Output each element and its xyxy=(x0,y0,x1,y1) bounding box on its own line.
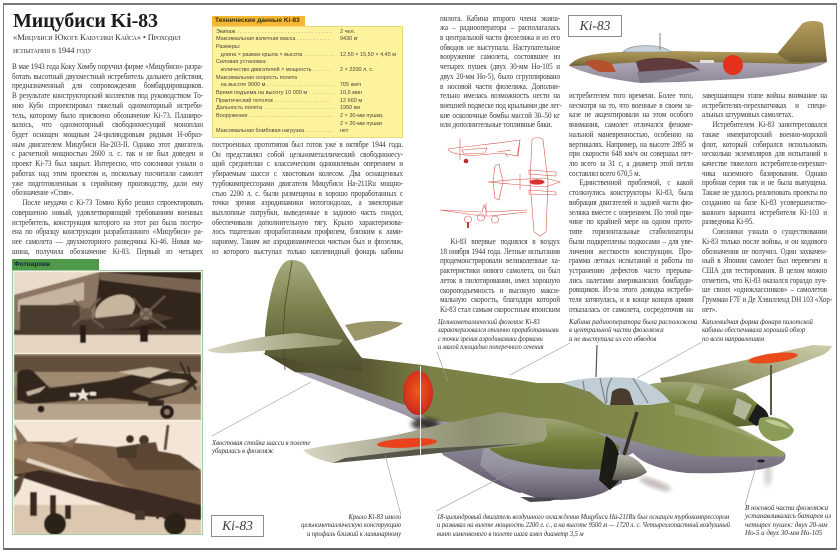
text column 4: нальной маневренностью, особенно на xyxy=(569,130,693,139)
text column 3 top: обводов не выступала. Наступательное xyxy=(440,43,560,52)
hinomaru xyxy=(723,55,743,75)
text column 4: ровщиков. Из-за этого доводка истреби- xyxy=(569,285,693,294)
text column 3 top: тельно имелась возможность нести на xyxy=(440,91,560,100)
table header: Технические данные Ki-83 xyxy=(215,17,300,24)
fuselage hinomaru xyxy=(403,371,433,415)
caption: fuselage: с точки зрения аэродинамики формами xyxy=(438,335,543,343)
text column 1: истребитель, конструкция которого на этот раз была постро- xyxy=(12,218,203,226)
text column 5: ванного варианта истребителя Ki-103 и xyxy=(702,208,827,217)
text column 1: шина, получила обозначение Ki-83. Первый из четырех xyxy=(12,247,203,256)
subtitle: «Мицубиси Юкоге Кабусики Кайса» • Проходил xyxy=(13,32,181,42)
side-view wheel xyxy=(464,159,468,163)
rear fuselage and belly xyxy=(263,353,785,493)
text column 2: нарному. Таким же аэродинамически чистым был и фюзеляж, xyxy=(212,237,403,246)
caption: nose guns: Но-5 и двух 30-мм Но-105 xyxy=(745,529,822,537)
main aircraft illustration xyxy=(207,260,832,502)
prop wash near engine xyxy=(638,474,672,494)
side view xyxy=(448,139,520,160)
text column 5: чика наземного базирования. Однако xyxy=(702,169,827,178)
text column 5: ше своих «одноклассников» – самолетов xyxy=(702,285,827,294)
text column 3 bottom: скороподъемность и высокую макси- xyxy=(440,286,560,295)
Ki-83 label top xyxy=(568,15,622,37)
caption: fuselage: Цельнометаллический фюзеляж Ki-83 xyxy=(438,318,540,326)
text column 4: лю всего за 31 с, а диаметр этой петли xyxy=(569,159,693,168)
subtitle xyxy=(13,32,181,55)
caption: canopy xyxy=(702,318,813,343)
caption: nose guns: устанавливалась батарея из xyxy=(745,512,831,520)
text column 3 bottom: Ki-83 стал самым скоростным японским xyxy=(440,305,560,314)
text column 5: качестве тяжелого истребителя-перехват- xyxy=(702,159,827,168)
text column 4: типе горизонтальные стабилизаторы xyxy=(569,227,693,236)
text column 5: созданию на базе Ki-83 усовершенство- xyxy=(702,198,827,207)
text column 4: казе не акцентировали на этом особого xyxy=(569,110,693,119)
caption: wing: и профиль близкий к ламинарному xyxy=(307,530,401,538)
table body: 1950 км xyxy=(340,105,360,111)
text column 2: лось тщательно проработанным профилем, близким к лами- xyxy=(212,227,403,236)
text column 2: убираемым шасси с хвостовым колесом. Два оснащенных xyxy=(212,169,403,178)
text column 3 top xyxy=(440,14,562,129)
gun port xyxy=(757,460,765,462)
text column 5: нет». xyxy=(702,305,717,314)
text column 3 bottom: Ki-83 впервые поднялся в воздух xyxy=(450,237,560,246)
Ki-83 label bottom xyxy=(211,515,264,537)
caption: engine: и развивал на взлете мощность 2200 л. с., а на высоте 9500 м — 1720 л. с. Четырехлопастный воздушный xyxy=(437,521,730,529)
caption: tail wheel: убиралась в фюзеляж xyxy=(212,447,274,455)
text column 1: совершенно новый, удовлетворяющий требованиям военных xyxy=(12,208,203,217)
table body: Вооружение .............................. xyxy=(216,113,334,119)
table body: на высоте 9000 м ........................ xyxy=(221,82,335,88)
fuselage side xyxy=(569,51,827,83)
text column 1: валось, что одномоторный свободнонесущий моноплан xyxy=(12,120,203,129)
engine nacelle xyxy=(585,60,616,72)
plan view xyxy=(488,138,560,236)
text column 4: устранению дефектов часто прерыва- xyxy=(569,266,693,275)
photo archive header: Фотоархив xyxy=(14,261,50,268)
text column 4: вибрация двигателей и задней части фю- xyxy=(569,198,693,207)
text column 3 top: вооружение самолета, состоявшее из xyxy=(440,52,560,61)
text column 3 bottom: продемонстрировали великолепные ха- xyxy=(440,256,560,265)
text column 1: уже подготовленным к серийному производству, дали ему xyxy=(12,179,203,188)
caption: canopy: по всем направлениям xyxy=(702,335,764,343)
Ki-83 label bottom: Ki-83 xyxy=(222,518,253,533)
photo archive header xyxy=(12,259,99,270)
caption: canopy: кабины обеспечивала хороший обзор xyxy=(702,326,805,334)
table body: Дальность полета ......................... xyxy=(216,105,334,111)
text column 4: при скорости 648 км/ч он совершал пет- xyxy=(569,149,693,158)
text column 5: обозначения не получил. Один захвачен- xyxy=(702,246,827,256)
text column 1: ным двигателем Мицубиси На-203-II. Однако этот двигатель xyxy=(12,140,203,149)
text column 2: обеспечивали дополнительную тягу. Крыло характеризова- xyxy=(212,218,403,227)
text column 5: несколько экземпляров для испытаний в xyxy=(702,149,827,158)
text column 5: ный в Японии самолет был перевезен в xyxy=(702,256,827,265)
caption: radio operator cabin: в центральной части фюзеляжа xyxy=(569,326,664,334)
fuselage band xyxy=(700,60,714,63)
photo: technicians on the wing xyxy=(14,421,201,535)
text column 1: работах над этим проектом и, поскольку посчитали самолет xyxy=(12,169,203,178)
leader lines xyxy=(212,342,757,515)
front view xyxy=(440,203,527,228)
caption: fuselage: характеризовался отлично проработанными xyxy=(438,326,559,334)
fin xyxy=(777,21,827,62)
far engine xyxy=(650,365,794,441)
wing leading edge shade xyxy=(333,441,544,463)
profile view of the aircraft xyxy=(569,21,827,83)
text column 1: В мае 1943 года Коку Хомбу поручил фирме «Мицубиси» разра- xyxy=(12,62,203,71)
table body: Практический потолок .................... xyxy=(216,98,331,104)
subtitle: испытания в 1944 году xyxy=(13,45,92,55)
table body: 10,5 мин xyxy=(340,90,362,96)
table body: 2 × 2200 л. с. xyxy=(340,67,374,73)
text column 2: выхлопные патрубки, выведенные в заднюю часть гондол, xyxy=(212,208,403,217)
text column 3 top: в центральной части фюзеляжа и из его xyxy=(440,33,560,42)
text column 1: проект Ki-73 был закрыт. Интересно, что союзники узнали о xyxy=(12,159,203,168)
caption: engine: винт изменяемого в полете шага имел диаметр 3,5 м xyxy=(437,530,584,538)
text column 5: отметить, что Ki-83 оказался гораздо луч- xyxy=(702,276,827,285)
text column 3 bottom xyxy=(440,237,560,314)
text column 3 top: пилота. Кабина второго члена экипа- xyxy=(440,14,560,22)
text column 4: столкнулись конструкторы Ki-83, была xyxy=(569,188,693,197)
text column 1: мио Кубо спроектировал тяжелый одномоторный истреби- xyxy=(12,101,203,110)
fuselage upper olive xyxy=(263,353,785,457)
text column 3 bottom: мальную скорость, благодаря которой xyxy=(440,295,560,304)
table body: 2 × 20-мм пушки xyxy=(340,121,382,127)
photo: captured aircraft on airfield xyxy=(14,354,201,420)
table body: 2 чел. xyxy=(340,28,355,34)
text column 2: щий среднеплан с классическим однокилевым оперением и xyxy=(212,159,403,168)
text column 3 bottom: 18 ноября 1944 года. Летные испытания xyxy=(440,247,560,256)
table body: 12 660 м xyxy=(340,98,362,104)
photo: hangar xyxy=(14,272,201,353)
Ki-83 label top: Ki-83 xyxy=(580,18,610,33)
caption: wing: Крыло Ki-83 имело xyxy=(349,513,401,521)
text column 2: точки зрения аэродинамики мотогондолах, а эжекторные xyxy=(212,198,403,207)
caption: engine: 18-цилиндровый двигатель воздушного охлаждения Мицубиси На-211Ru был оснащен турбокомпрессором xyxy=(437,513,729,521)
text column 4: чине по крайней мере на одном прото- xyxy=(569,217,693,226)
text column 3 top: кие осколочные бомбы массой 30–50 кг xyxy=(440,111,560,120)
table header xyxy=(212,16,305,26)
near wing xyxy=(303,412,547,463)
caption: tail wheel xyxy=(211,439,310,455)
antenna xyxy=(659,33,661,50)
text column 1: тель, которому было присвоено обозначение Ki-73. Планиро- xyxy=(12,111,203,120)
text column 1: нее самолета — двухмоторного разведчика Ki-46. Новая ма- xyxy=(12,237,203,246)
text column 4: зеляжа вместе с оперением. По этой при- xyxy=(569,208,693,217)
text column 1: обозначение «Стив». xyxy=(12,188,73,197)
text column 5: также императорский военно-морской xyxy=(702,130,827,139)
text column 5: США для тестирования. В целом можно xyxy=(702,266,827,275)
text column 4: личения жесткости конструкции. Про- xyxy=(569,246,693,256)
table body: 2 × 30-мм пушки, xyxy=(340,113,384,119)
caption: nose guns: В носовой части фюзеляжа xyxy=(745,504,828,512)
caption: wing: цельнометаллическую конструкцию xyxy=(301,521,401,529)
caption: radio operator cabin: Кабина радиооператора была расположена xyxy=(569,318,697,326)
text column 3 top: внешней подвеске под крыльями две лег- xyxy=(440,101,562,110)
caption: fuselage: и малой площадью поперечного сечения xyxy=(438,343,543,351)
antenna mast xyxy=(596,345,597,377)
text column 2: построенных прототипов был готов уже в октябре 1944 года. xyxy=(212,140,403,149)
caption: radio operator cabin xyxy=(568,318,697,343)
table body: количество двигателей × мощность ....... xyxy=(221,67,333,73)
wing underside hinomaru xyxy=(377,437,437,449)
text column 2: Он представлял собой цельнометаллический свободнонесу- xyxy=(212,150,403,159)
table body: 705 км/ч xyxy=(340,82,361,88)
caption: canopy: Каплевидная форма фонаря пилотской xyxy=(702,318,813,326)
text column 4: были подкреплены подкосами – для уве- xyxy=(569,237,693,246)
far tailplane xyxy=(345,321,403,341)
text column 2: турбокомпрессорами двигателя Мицубиси На-211Ru мощно- xyxy=(212,179,403,188)
text column 1 xyxy=(12,62,203,256)
pilot xyxy=(610,388,634,405)
table body: длина × размах крыла × высота ........... xyxy=(221,52,335,58)
text column 1: После неудачи с Ki-73 Томио Кубо решил спроектировать xyxy=(22,198,203,207)
table body: 12,50 × 15,50 × 4,45 м xyxy=(340,52,396,58)
text column 4: лись налетами американских бомбарди- xyxy=(569,276,693,285)
fuselage dark blot xyxy=(411,418,439,430)
text column 5: Грумман F7F и Де Хэвилленд DH 103 «Хор- xyxy=(702,295,832,304)
text column 4: грамма летных испытаний и работы по xyxy=(569,256,693,265)
nose highlight xyxy=(675,404,770,445)
text column 5: завершающем этапе войны внимание на xyxy=(702,91,827,100)
text column 4: составлял всего 670,5 м. xyxy=(569,169,640,178)
near engine xyxy=(480,418,647,502)
table body xyxy=(212,26,403,138)
text column 3 bottom: леток в пилотировании, имел хорошую xyxy=(440,276,560,285)
text column 5: флот, который собирался использовать xyxy=(702,140,827,149)
text column 3 top: четырех пушек (двух 30-мм Но-105 и xyxy=(440,62,560,71)
text column 1: ена по образцу конструкции разработанного «Мицубиси» ра- xyxy=(12,227,203,236)
near propeller blade xyxy=(624,412,637,455)
text column 1: предназначенный для сопровождения бомбардировщиков. xyxy=(12,81,203,90)
caption: fuselage xyxy=(438,318,559,351)
text column 1: с расчетной мощностью 2600 л. с. так и не был доведен и xyxy=(12,149,203,158)
text column 1: будет оснащен мощным 24-цилиндровым рядным Н-образ- xyxy=(12,130,203,139)
text column 5: пробная серия так и не была выпущена. xyxy=(702,178,827,187)
prop wash near nose xyxy=(764,462,772,486)
text column 5: альных штурмовых самолетах. xyxy=(702,110,793,119)
near tailplane xyxy=(207,333,343,353)
text column 2: из которого выступал только каплевидный фонарь кабины xyxy=(212,247,403,256)
front-view gear xyxy=(467,222,469,228)
rudder hinge xyxy=(283,261,292,370)
text column 3 bottom: рактеристики нового самолета, он был xyxy=(440,266,560,275)
text column 3 top: или дополнительные топливные баки. xyxy=(440,120,552,129)
table body: Силовая установка: xyxy=(216,59,267,65)
text column 4: вертикалях. Например, на высоте 2895 м xyxy=(569,140,693,149)
text column 3 top: двух 20-мм Но-5), было сгруппировано xyxy=(440,72,560,81)
rear fold line xyxy=(420,366,422,456)
text column 2: стью 2200 л. с. были размещены в хорошо проработанных с xyxy=(212,189,403,198)
text column 4: отказалась от самолета, сосредоточив на xyxy=(569,305,693,314)
title: Мицубиси Ki-83 xyxy=(13,10,158,32)
text column 5: истребителях-перехватчиках и специ- xyxy=(702,101,827,110)
three-view drawing xyxy=(440,138,560,236)
text column 3 top: жа – радиооператора – располагалась xyxy=(440,23,560,32)
table body: нет xyxy=(340,128,348,134)
text column 5 xyxy=(702,91,832,314)
text column 4: внимания, самолет отличался феноме- xyxy=(569,120,693,129)
canopy xyxy=(562,377,670,405)
table body: Максимальная бомбовая нагрузка .......... xyxy=(216,128,334,134)
far wing hinomaru xyxy=(748,350,798,366)
text column 1: ботать высотный двухместный истребитель дальнего действия, xyxy=(12,72,203,81)
text column 5: Истребителем Ki-83 заинтересовался xyxy=(712,120,827,129)
canopy xyxy=(623,46,671,52)
caption: engine xyxy=(437,513,730,538)
text column 5: Ki-83 только после войны, и он кодового xyxy=(702,237,827,246)
caption: wing xyxy=(301,513,402,538)
text column 2 xyxy=(212,140,403,256)
table body: Время подъема на высоту 10 000 м ......... xyxy=(216,90,334,96)
fin xyxy=(265,260,362,372)
technical data table xyxy=(212,16,403,138)
text column 5: Союзники узнали о существовании xyxy=(712,227,827,236)
far wing xyxy=(660,345,832,392)
caption: radio operator cabin: и не выступала из его обводов xyxy=(569,335,656,343)
table body: 9430 кг xyxy=(340,36,358,42)
panel: photo frame xyxy=(12,270,202,535)
caption: nose guns xyxy=(744,504,831,537)
text column 4: несмотря на то, что военные в своем за- xyxy=(569,101,693,110)
table body: Максимальная скорость полета xyxy=(216,75,297,81)
table body: Размеры: xyxy=(216,44,240,50)
caption: nose guns: четырех пушек: двух 20-мм xyxy=(745,521,827,529)
text column 4: Единственной проблемой, с какой xyxy=(579,178,693,187)
plan-view red panel xyxy=(530,179,544,185)
text column 5: Также не удалось реализовать проекты по xyxy=(702,188,827,197)
table body: Экипаж .................................. xyxy=(216,28,333,34)
text column 5: разведчика Ki-95. xyxy=(702,217,754,226)
caption: tail wheel: Хвостовая стойка шасси в полете xyxy=(212,439,310,447)
text column 4 xyxy=(569,91,694,314)
text column 4: истребителем того времени. Более того, xyxy=(569,91,693,100)
table body: Максимальная взлетная масса ............ xyxy=(216,36,331,42)
text column 1: В результате конструкторский коллектив под руководством То- xyxy=(12,91,203,100)
text column 4: теля затянулась, и в конце концов армия xyxy=(569,295,693,304)
text column 3 top: в носовой части фюзеляжа. Дополни- xyxy=(440,82,560,91)
